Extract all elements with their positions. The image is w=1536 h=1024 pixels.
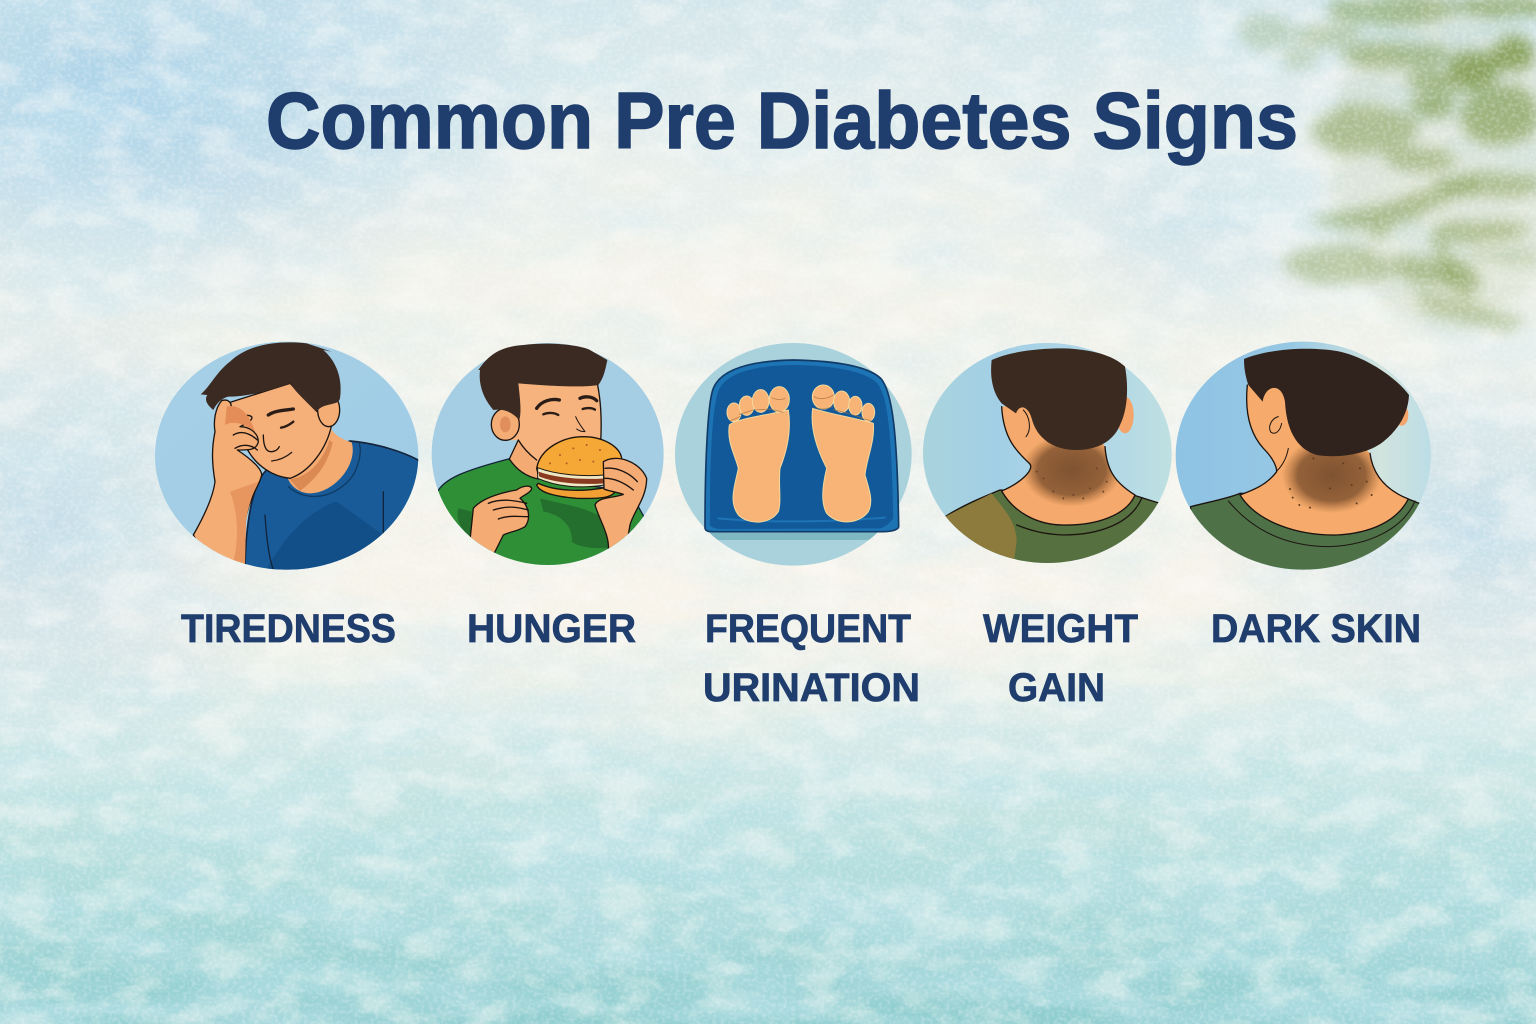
- label: frequent urination: [703, 607, 920, 710]
- title: Common Pre Diabetes Signs: [266, 76, 1298, 165]
- foliage: blurred green leaves, top right: [1240, 0, 1536, 330]
- label: tiredness: TIREDNESS: [181, 607, 396, 651]
- icons row 2: urination and weight gain: [675, 343, 1173, 575]
- label: hunger: HUNGER: [467, 607, 636, 651]
- icon: back of neck with dark skin patch: [1176, 342, 1433, 575]
- icon: man eating a burger: [432, 343, 664, 575]
- icons row 1: tiredness and hunger: [155, 342, 664, 575]
- icon: tired man holding his head: [155, 342, 420, 575]
- icon: back of neck with darkened skin, weight gain: [923, 343, 1173, 575]
- label: dark skin: DARK SKIN: [1211, 607, 1421, 651]
- label: frequent urination: URINATION: [703, 666, 920, 710]
- label: weight gain: [983, 607, 1138, 710]
- label: weight gain: GAIN: [1008, 666, 1105, 710]
- label: frequent urination: FREQUENT: [705, 607, 911, 651]
- label: weight gain: WEIGHT: [983, 607, 1138, 651]
- icon: bare feet on a blue mat: [675, 343, 912, 566]
